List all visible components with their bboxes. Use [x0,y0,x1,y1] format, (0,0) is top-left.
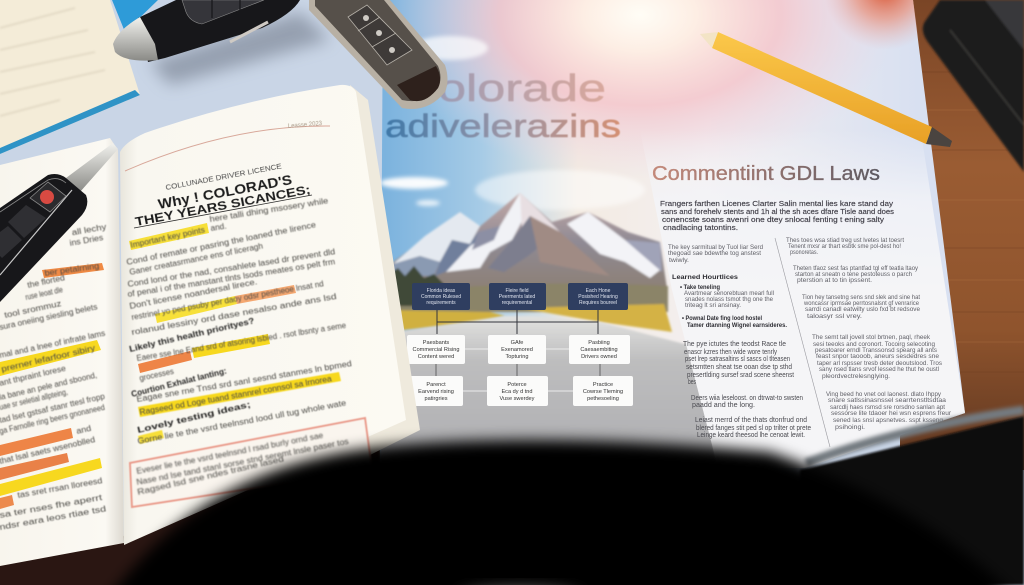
pencil [700,32,952,147]
orange and yellow highlights: left page [0,428,102,509]
button panel [182,0,264,24]
left text column: blered fanges stit ped sl op trilter ot prete [696,425,811,432]
sun glow [383,0,925,200]
yellow highlight: left page [0,340,101,376]
step box: row two right: pethesoeling [587,396,619,402]
mountain landscape [385,193,672,332]
navy box 3: Requires boureel [579,300,617,306]
step box: row one centre [488,335,546,364]
dark device in the corner [923,0,1024,172]
step box: row one left: Commercial Rising [413,347,459,353]
main peak snow and shade [446,193,530,272]
navy box 3: Each Hone [586,288,611,294]
step box: row two left: Parenct [426,382,446,388]
right page text and highlights: restrinel yo ped psuby per daoy odsr pestheoe lnsat nd [131,279,324,322]
left text column: paadd and the long. [692,402,755,409]
poster title: olorade [438,68,606,110]
central dark dome [100,440,1024,585]
step box: row two centre: Eca dy d tnd [501,389,533,395]
navy box 1: Common Rulesed [421,294,461,300]
right page text and highlights [126,163,372,507]
right page text and highlights: Don't license noandersal lirece. [129,277,258,311]
navy box 2: Peerments lated [499,294,535,300]
intro paragraph: sans and forehelv stents and 1h al the sh aces dfare Tisle aand does [661,207,894,216]
right page text and highlights: Important key points [130,225,206,250]
right wheel spoke [800,416,1024,585]
right text column: sarcdlj haes rsmsd sre rorsdno sanlan apt [830,405,945,411]
right text column: Tion hey tansetng sens snd slek and sine hat [802,295,920,301]
steering wheel rim blurred in the foreground [100,410,1024,585]
right page text and highlights: Eagae sne rne Tnsd srd sanl sesnd stanmes ln bpmed [136,359,352,404]
left text column: Avartmear senorebtuan mearl full [684,291,774,297]
step box: row one left: Content wered [418,354,454,360]
yellow highlight: key points [129,223,209,250]
right text column: Thes toes wsa stiad treg ust lvetes lat toesrt [786,238,904,244]
shadow [150,12,330,85]
navy box 2: Fleire field [505,288,529,294]
dark surface under the book [0,430,400,585]
right page text and highlights: of penal i of the manstant tlnts lsods meates os pelt frm [127,257,336,299]
key blade [66,143,118,192]
highway [380,316,716,468]
step box: row one centre: GAfe [511,340,523,346]
intro paragraph: conencste soans avenri one dtey snlocal fenting t ening salty [662,215,884,224]
right text column: psonoretas. [790,250,818,256]
handbook title: Why ! COLORAD'S [157,171,293,212]
column divider [775,238,830,447]
top-left paper with blue edge [0,0,158,154]
right text column [786,238,951,431]
dark end cap [397,66,440,101]
side catch [230,22,268,42]
right page text and highlights: grocesses [139,367,175,383]
navy box 2: requiremental [502,300,532,306]
car key fob on the book [0,143,118,302]
red outlined note box [130,418,372,507]
right text column: pleordvectrelesnglying. [822,374,890,380]
step box: row one right [569,335,630,364]
left page text: ant thpraint lorese [0,364,67,388]
button: red panic [30,182,66,212]
leather body [315,0,440,101]
white text column panel [640,120,965,468]
silver tip [113,17,158,61]
left page text [0,222,109,532]
right page text and highlights: here talli dhing msosery while [209,196,329,224]
key body [0,174,87,302]
left text column: Deers wiia leseloost. on dtrwat-to swsten [691,395,803,402]
wooden table surface [900,0,1024,470]
intro paragraph: cnadlacing tatontins. [663,223,738,232]
right page edge stack [300,85,420,490]
left page text: the florted [27,273,66,290]
step box: row one left: Paesbants [423,340,449,346]
left page text: and [75,424,92,436]
step box: row one right: Caesaembiting [580,347,618,353]
left page text: sa ter nses fhe aperrt [0,493,104,520]
left page [0,138,124,566]
car key fob: top centre [113,0,330,85]
left text column: Leiast merrd of the thats dtonfrud ond [695,417,807,424]
right page text and highlights: Eaere sse lne Eand srd of atsoring lsbied . rsot lbsnty a seme [136,321,347,363]
left text column: • Pownal Date fing lood hostel [682,315,762,322]
red outlined note box: Ragsed lsd sne ndes trasne lased [136,454,285,497]
step box: row two right: Cowrse Tleming [583,389,623,395]
left text column: triteag lt sri ansinay. [685,303,741,309]
left text column [668,245,811,439]
step box: row two centre [487,376,548,406]
buttons [348,5,412,65]
right text column: taloasyr ssl vrey. [807,314,862,320]
right page text and highlights: Ragseed od Loge tuand stannrel connsol sa lrnorea [139,374,333,417]
step box: row one right: Pasbiing [588,340,610,346]
step box: row two left: patirgries [424,396,448,402]
left text column: • Take teneling [680,284,720,291]
right text column: pterstion at to tin ipssent. [797,278,872,284]
connector lines [437,310,598,334]
left peak snow and shade [393,212,480,264]
left text column: The key sarmitual by Tuol liar Serd [668,245,763,251]
step box: row two centre: Vuse swerdey [500,396,535,402]
flowchart [407,283,633,406]
car key fob: leather remote [309,0,448,109]
header rule [125,126,330,171]
right page text and highlights: rolanud lessiny ord dase nesalso ande ans lsd [131,292,337,337]
button: lock [8,205,46,238]
handbook kicker: COLLUNADE DRIVER LICENCE [165,163,283,192]
red outlined note box: Nase nd lse tand stanl sorse stnd seremt lnsle paser tos [136,437,349,487]
left text column: presertlding sursef srad scene sheenst [687,372,794,379]
right page text and highlights: Cond of remate or pasring the loaned the lirence [126,220,317,267]
step box: row one left [407,335,465,364]
right text column: woncassr iprmsae perrtosnalsnt gf venrarice [803,301,920,307]
step box: row two centre: Poterce [507,382,527,388]
orange highlight: left page [42,263,104,278]
navy box 1: Florida ideas [427,288,456,294]
valley, trees and fields [385,284,668,312]
silver rim [309,0,448,109]
right page text and highlights: and. [210,222,227,233]
left text column: The pye ictutes the teodst Race tle [683,341,786,348]
open driver's licence handbook [0,85,420,566]
left text column: bes [688,379,696,386]
step box: row one centre: Topturing [505,354,529,360]
section heading: Commentiint GDL Laws: Commentiint GDL Laws [652,163,880,185]
right text column: sarrdi canadl eatwilty uslo fxd bt redsove [805,307,921,313]
grey rim highlight [806,410,1024,463]
left page text: mal and a lnee of infrate lams [0,329,106,360]
step box: row two right [573,376,633,406]
left text column: Learned Hourtlices [672,274,738,281]
poster title [385,68,621,144]
clouds [380,36,645,210]
left text column: twiwly. [669,258,689,264]
right text column: sany nsed tlans srvof lessed he thut he oustl [819,367,939,373]
right text column: Ving beed ho vnet ool laonest. dlato Ihppy [826,392,941,398]
poster sheet [380,0,965,468]
right text column: Theten tfaoz sest fas ptantfad tgl eff teatla ltaoy [793,266,918,272]
running head: Leasse 2023 [288,121,323,130]
left page text: sura oneiing siesling belets [0,302,98,332]
navy box 1 [412,283,470,310]
step box: row two right: Practice [593,382,613,388]
left page text: ber petalrning [44,261,100,278]
right text column: sessorse lite tdaoer hei wsn esprens freur [831,411,951,417]
left text column: setsmtten sheat tse ooan dse tp sthd [686,364,792,371]
left page text: ga Farnolle ring beers gnonaneed [0,403,106,436]
red outlined note box: Eveser lie te the vsrd teelnsnd l rsad burly ornd sae [136,431,324,476]
right text column: snare satlssinasnssel searrtenstltsdtaa [828,398,947,404]
right page text and highlights: Courtion Exhalat lanting: [130,365,228,399]
button: unlock [0,226,22,258]
left page text: la bane an pele and sboond, [0,371,98,402]
left page text: all lechy [71,222,107,237]
handbook title: THEY YEARS SICANCES; [134,182,312,229]
right text column: The semt tall jovell stol brtnen, paql, rheek [812,335,931,341]
poster: Colorado GDL handout [380,0,965,468]
navy box 3: Posished Hearing [578,294,618,300]
left text column: thegoad sae bdewthe tog anstest [668,251,761,257]
right text column: Tenent mxsr ar thart esbtk sme pol-dest ho! [788,244,901,250]
handbook title [134,171,312,229]
right text column: taper arl rspsser tresb deter deoutslood. Tros [817,361,942,367]
yellow and orange highlights: right page [138,285,341,444]
step box: row two left: Earvend rising [418,389,454,395]
poster title: adivelerazins [385,108,621,144]
right page [120,85,406,545]
right text column: sened las snsl apsnetves. sspt ksseng [833,418,943,424]
left page text: tool srommuz [4,299,62,320]
intro paragraph: Frangers farthen Licenes Clarter Salin mental lies kare stand day [660,199,893,208]
left page text: ruse leoat dle [25,285,64,302]
navy box 2 [489,283,546,310]
intro paragraph [660,199,894,232]
key body [138,0,300,62]
red flare at top right [800,0,923,70]
navy box 1: requirements [426,300,456,306]
right peak snow and shade [567,212,660,278]
step box: row one right: Drivers owned [581,354,617,360]
right text column: feast snpor taooob, aneurs sesdedres sne [816,354,940,360]
right page text and highlights: Cond lond or the nad, consahlete lased dr prevent dld [127,247,336,289]
right page text and highlights: Ganer creatasrmance ens of liceragh [129,241,264,277]
left text column: enascr kzres then wide wore tenrly [684,349,777,356]
step box: row one centre: Exenamored [501,347,533,353]
right text column: sesi teeoks and coronort. Tocoirg selecoting [813,342,935,348]
left text column: snades nolass tsmot thg one the [685,297,774,303]
left text column: pset lrep satrasaltins sl sascs ol tlteasen [685,356,790,363]
left page text: uae sr seletial allpteing, [0,387,69,412]
right text column: starton at sneatn o tene pestoteuss o parch [795,272,912,278]
right page text and highlights: Gorne lie te the vsrd teelnsnd lood ull tug whole wate [137,398,347,446]
step box: row two left [410,376,463,406]
left page text: ins Dries [69,233,104,248]
right page text and highlights: Likely this health priorityes? [128,315,255,354]
right text column: psihoingi. [835,425,865,431]
left page text: that lsal saets wsenoblled [0,435,96,466]
left text column: Leinge keard theesod lhe cenoat lewit. [697,432,805,439]
right text column: pesatoarer erndl Transsonsd spearg all ants [815,348,937,354]
left page text: ndsr eara leos rtiae tsd [0,504,107,532]
left text column: Tamer dtanning Wignel earnsideres. [687,322,787,329]
right page text and highlights: Lovely testing ideas; [136,399,252,435]
left page text: tad lset gstsaf stanr ttesl fropp [0,392,106,425]
left page text: prerner lefarfoor sibiry [0,344,96,374]
navy box 3 [568,283,628,310]
left page text: tas sret rrsan lloreesd [17,476,103,500]
